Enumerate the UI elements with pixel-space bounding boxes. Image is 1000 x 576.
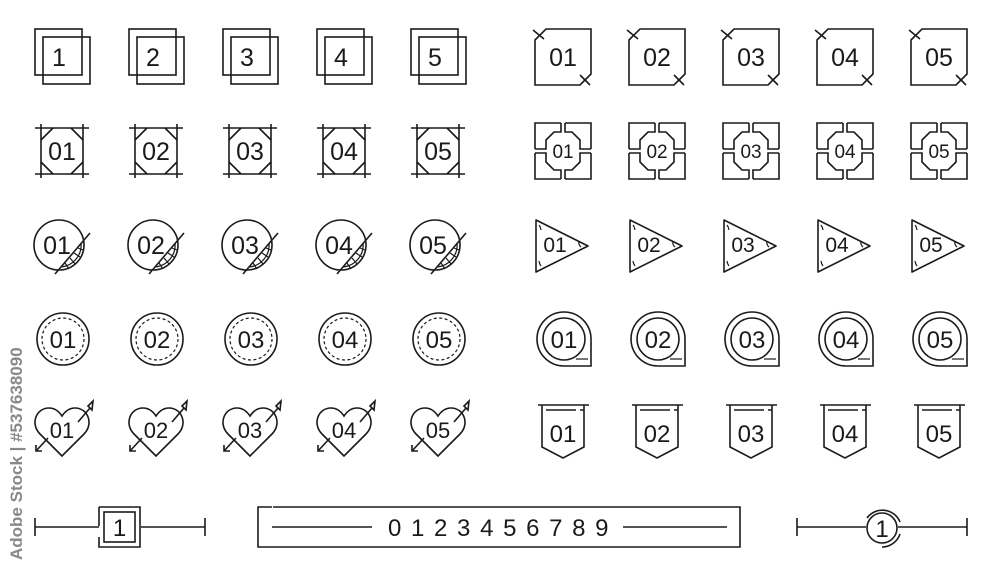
row 3 right: triangles: 01 bbox=[543, 234, 567, 257]
row 3 left: hatched circles: 01 bbox=[43, 232, 71, 260]
row 1 left: overlapping squares 1-5: 4 bbox=[334, 44, 348, 72]
row 1 right: cut corner squares: 02 bbox=[643, 44, 671, 72]
bottom middle: digit strip bbox=[258, 507, 740, 547]
row 1 right: cut corner squares: 01 bbox=[549, 44, 577, 72]
row 5 left: hearts with arrows: 01 bbox=[50, 418, 74, 443]
row 1 right: cut corner squares bbox=[533, 29, 967, 85]
row 2 right: segmented frames: 03 bbox=[740, 142, 762, 163]
row 1 right: cut corner squares: 04 bbox=[831, 44, 859, 72]
row 4 left: dashed circles: 05 bbox=[426, 327, 452, 354]
row 4 left: dashed circles: 04 bbox=[332, 327, 358, 354]
row 2 left: octagon frames: 05 bbox=[424, 138, 452, 166]
row 2 right: segmented frames: 02 bbox=[646, 142, 668, 163]
row 5 right: pennants: 05 bbox=[926, 421, 952, 448]
row 2 right: segmented frames: 01 bbox=[552, 142, 574, 163]
row 1 left: overlapping squares 1-5: 3 bbox=[240, 44, 254, 72]
row 3 right: triangles: 04 bbox=[825, 234, 849, 257]
bottom middle: digit strip: 0 1 2 3 4 5 6 7 8 9 bbox=[388, 515, 610, 542]
row 3 left: hatched circles: 04 bbox=[325, 232, 353, 260]
row 2 right: segmented frames bbox=[535, 123, 967, 179]
row 3 right: triangles: 05 bbox=[919, 234, 943, 257]
row 1 right: cut corner squares: 05 bbox=[925, 44, 953, 72]
row 4 left: dashed circles: 01 bbox=[50, 327, 76, 354]
row 2 left: octagon frames: 04 bbox=[330, 138, 358, 166]
row 2 left: octagon frames bbox=[35, 124, 465, 178]
row 3 right: triangles bbox=[536, 220, 964, 272]
row 5 left: hearts with arrows: 03 bbox=[238, 418, 262, 443]
row 1 left: overlapping squares 1-5: 5 bbox=[428, 44, 442, 72]
row 1 right: cut corner squares: 03 bbox=[737, 44, 765, 72]
row 4 left: dashed circles: 03 bbox=[238, 327, 264, 354]
row 3 left: hatched circles bbox=[34, 220, 466, 274]
row 4 left: dashed circles bbox=[37, 313, 465, 365]
row 1 left: overlapping squares 1-5: 1 bbox=[52, 44, 66, 72]
row 5 right: pennants bbox=[538, 405, 965, 458]
row 5 left: hearts with arrows bbox=[35, 401, 469, 456]
bottom right: line with circled 1: 1 bbox=[875, 516, 889, 543]
row 2 left: octagon frames: 03 bbox=[236, 138, 264, 166]
row 4 right: pin circles bbox=[537, 312, 967, 366]
row 2 left: octagon frames: 01 bbox=[48, 138, 76, 166]
row 5 right: pennants: 01 bbox=[550, 421, 576, 448]
row 5 right: pennants: 02 bbox=[644, 421, 670, 448]
row 3 left: hatched circles: 02 bbox=[137, 232, 165, 260]
row 3 left: hatched circles: 03 bbox=[231, 232, 259, 260]
row 2 left: octagon frames: 02 bbox=[142, 138, 170, 166]
watermark: vertical stock id: Adobe Stock | #537638090 bbox=[7, 347, 26, 560]
row 5 right: pennants: 04 bbox=[832, 421, 858, 448]
bottom right: line with circled 1 bbox=[797, 510, 967, 547]
row 5 left: hearts with arrows: 04 bbox=[332, 418, 356, 443]
row 3 right: triangles: 03 bbox=[731, 234, 755, 257]
row 4 right: pin circles: 02 bbox=[645, 327, 671, 354]
row 2 right: segmented frames: 05 bbox=[928, 142, 950, 163]
row 5 left: hearts with arrows: 05 bbox=[426, 418, 450, 443]
bottom left: line with boxed 1 bbox=[35, 507, 205, 547]
row 1 left: overlapping squares 1-5 bbox=[35, 29, 466, 84]
row 4 right: pin circles: 04 bbox=[833, 327, 859, 354]
row 4 right: pin circles: 03 bbox=[739, 327, 765, 354]
row 3 left: hatched circles: 05 bbox=[419, 232, 447, 260]
row 4 right: pin circles: 05 bbox=[927, 327, 953, 354]
row 5 left: hearts with arrows: 02 bbox=[144, 418, 168, 443]
row 5 right: pennants: 03 bbox=[738, 421, 764, 448]
row 1 left: overlapping squares 1-5: 2 bbox=[146, 44, 160, 72]
row 3 right: triangles: 02 bbox=[637, 234, 661, 257]
row 4 right: pin circles: 01 bbox=[551, 327, 577, 354]
bottom left: line with boxed 1: 1 bbox=[113, 515, 126, 542]
row 4 left: dashed circles: 02 bbox=[144, 327, 170, 354]
row 2 right: segmented frames: 04 bbox=[834, 142, 856, 163]
